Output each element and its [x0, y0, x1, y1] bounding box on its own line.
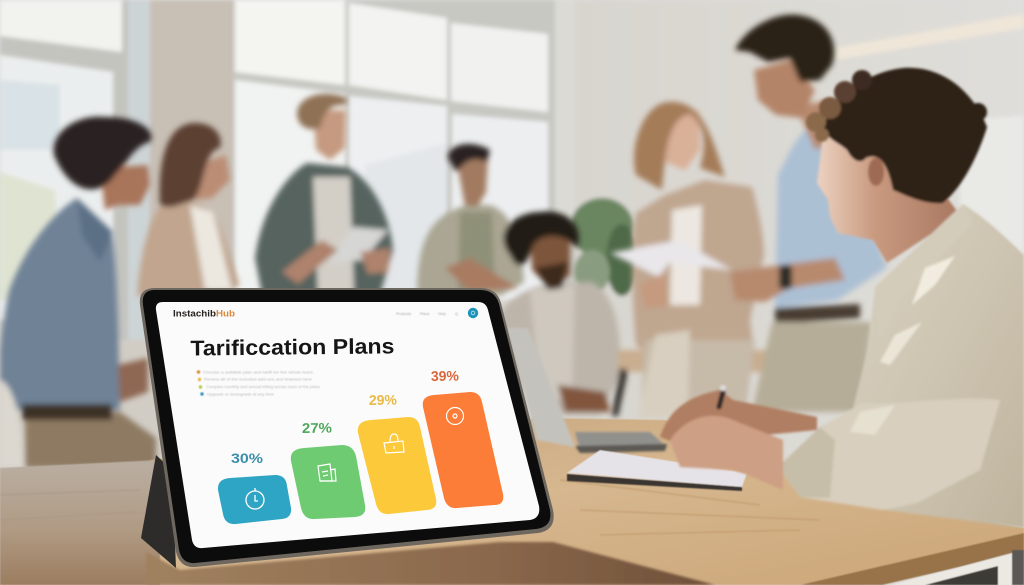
- foreground man: [660, 68, 1024, 528]
- value 30%: 30%: [231, 450, 264, 466]
- hair: [806, 68, 987, 203]
- icon: target: [446, 408, 464, 424]
- white table leg: [892, 553, 1012, 585]
- person: standing man centre: [255, 94, 393, 295]
- forearm and hands: [660, 390, 817, 445]
- wall device: [998, 160, 1020, 184]
- navigation: Q: [455, 312, 458, 316]
- desk behind: [618, 350, 780, 372]
- left window: [0, 0, 152, 340]
- bullet list: [197, 370, 320, 396]
- person: seated man centre: [498, 211, 620, 415]
- bullet list: Compare monthly and annual billing across each of the plans: [206, 384, 320, 389]
- icon: padlock box: [384, 434, 404, 453]
- logo: Instachib Hub: [173, 308, 236, 318]
- ceiling light: [835, 14, 1024, 60]
- tablet stand: [141, 455, 176, 568]
- person: seated man left: [0, 117, 156, 468]
- ear: [868, 158, 884, 186]
- right wall lower: [960, 116, 1024, 290]
- tablet screen: [156, 302, 539, 548]
- table dark foreground: [146, 542, 715, 585]
- torso and shirt: [850, 204, 1024, 528]
- value 39%: 39%: [431, 368, 460, 384]
- navigation: Help: [438, 312, 446, 316]
- bar 4: orange: [423, 368, 503, 508]
- icon: stopwatch: [246, 488, 264, 509]
- table surface: [0, 418, 1024, 585]
- value 29%: 29%: [369, 392, 398, 408]
- navigation: Products: [396, 312, 411, 316]
- centre window: [233, 0, 575, 300]
- user badge: [468, 308, 478, 318]
- background people: [0, 15, 887, 468]
- icon: documents: [318, 464, 336, 481]
- pen: [719, 392, 723, 407]
- person: woman right: [610, 102, 764, 418]
- notebook: [567, 450, 747, 491]
- neck and face: [817, 130, 960, 263]
- pillar: [150, 0, 234, 340]
- bullet list: Review all of the included add-ons and features here: [204, 376, 313, 382]
- navigation: Plans: [420, 312, 430, 316]
- person: man standing right: [730, 15, 887, 412]
- bullet list: Choose a suitable plan and tariff for the whole team: [203, 370, 314, 374]
- sleeve: [778, 399, 1000, 510]
- bullet list: Upgrade or downgrade at any time: [207, 392, 275, 396]
- bar 2: green: [291, 419, 365, 519]
- laptop: [507, 328, 667, 453]
- table left wood: [0, 460, 160, 585]
- tablet body: [140, 288, 554, 567]
- person: man far centre: [417, 144, 524, 296]
- value 27%: 27%: [302, 419, 333, 436]
- bar 3: yellow: [358, 392, 436, 514]
- title: Tarificcation Plans: [190, 334, 395, 360]
- person: woman left: [137, 123, 240, 298]
- bar 1: blue: [218, 450, 291, 524]
- navigation: [396, 312, 458, 316]
- table front edge: [800, 533, 1024, 585]
- plant: [570, 198, 638, 296]
- tablet: [140, 288, 554, 567]
